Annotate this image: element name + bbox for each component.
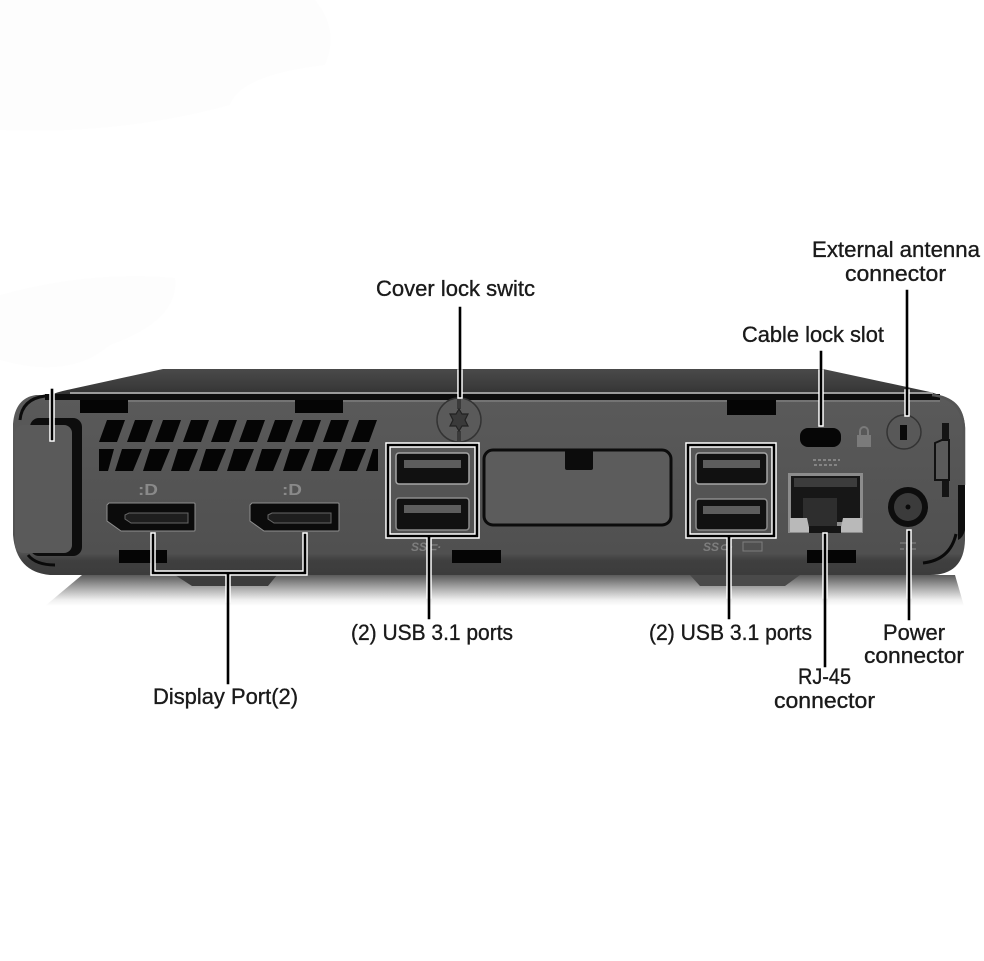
label: external antenna connector line 2: connector — [845, 261, 946, 286]
callout box: left USB ports — [388, 445, 477, 618]
chassis — [13, 369, 965, 575]
floor shadow — [45, 575, 964, 606]
padlock icon — [857, 427, 871, 447]
callout line: cover lock switch — [459, 308, 461, 396]
vent grille — [99, 420, 378, 471]
callout lines — [52, 291, 909, 683]
callout line: power connector — [908, 532, 910, 619]
label: RJ-45 connector line 2: connector — [774, 688, 875, 713]
external antenna connector — [887, 415, 921, 449]
side latch — [923, 423, 965, 563]
callout line: RJ-45 — [824, 535, 826, 666]
power connector — [888, 487, 928, 549]
USB ports right pair: SS⊂· — [703, 540, 733, 554]
label: cover lock switch: Cover lock switc — [376, 276, 535, 301]
DisplayPort port 2 — [250, 482, 339, 531]
USB ports right pair — [696, 453, 767, 554]
chassis slots — [80, 400, 856, 563]
label: left USB ports: (2) USB 3.1 ports — [351, 620, 513, 645]
chassis top surface — [40, 369, 950, 402]
callout line: external antenna — [906, 291, 908, 414]
removable side module — [15, 418, 82, 565]
label: right USB ports: (2) USB 3.1 ports — [649, 620, 812, 645]
label: power connector: Power — [883, 620, 945, 645]
label: cable lock slot: Cable lock slot — [742, 322, 884, 347]
label: RJ-45 connector: RJ-45 — [798, 664, 851, 689]
DisplayPort port 1: :D — [138, 482, 158, 499]
USB ports left pair — [396, 453, 469, 554]
USB ports left pair: SS⊂· — [411, 540, 441, 554]
callout bracket: display ports — [153, 535, 305, 683]
callout line: cable lock slot — [820, 352, 822, 424]
label: power connector line 2: connector — [864, 643, 964, 668]
callout line: side module — [51, 390, 53, 439]
callout box: right USB ports — [688, 445, 774, 618]
label: display port: Display Port(2) — [153, 684, 298, 709]
label: external antenna connector: External antenna — [812, 237, 981, 262]
cover lock screw — [437, 398, 481, 442]
cable lock slot — [800, 428, 841, 447]
DisplayPort port 1 — [107, 482, 195, 531]
network icon — [813, 460, 840, 465]
DisplayPort port 2: :D — [282, 482, 302, 499]
access panel — [484, 450, 671, 525]
chassis front face — [13, 395, 965, 575]
RJ-45 port — [788, 473, 863, 533]
